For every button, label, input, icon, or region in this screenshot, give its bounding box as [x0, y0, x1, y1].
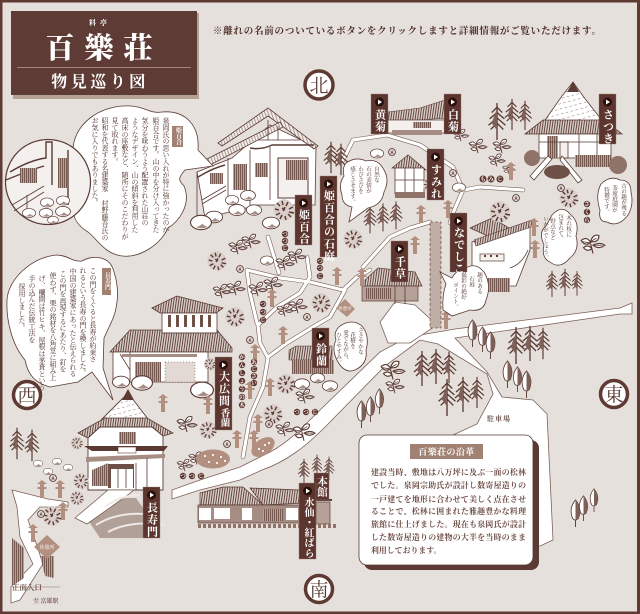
button: 白菊: 白菊 [446, 108, 459, 133]
title panel [11, 11, 199, 99]
panel: 長寿門 callout: この門を再現するにあたり、釘を [59, 270, 67, 372]
history heading [410, 444, 483, 459]
button: さつき: さつき [602, 109, 614, 145]
label: つつじ 2: じ [317, 273, 323, 280]
instruction note: ※離れの名前のついているボタンをクリックしますと詳細情報がご覧いただけます。 [213, 25, 602, 37]
history text: 利用しております。 [371, 545, 441, 555]
panel: 姫百合 callout: ようなデザイン、山の傾斜を利用した [130, 117, 139, 233]
azaleas and pines [177, 129, 605, 471]
panel: 姫百合 callout: 気分を味わうよう配置された山荘の [141, 116, 149, 226]
label: つつじ 2: つ [317, 266, 323, 272]
central garden paths [243, 135, 523, 457]
button: 本館: 本館 [316, 475, 327, 498]
label: つつじ 3: じ [260, 317, 266, 324]
label: あじさい: じ [251, 366, 257, 373]
callout: 茶室庭園 [598, 178, 632, 224]
title panel: 物見巡り図 [51, 73, 149, 91]
callout: 茶室庭園: 古の趣が残る [620, 182, 627, 216]
label: もみじ: も [480, 175, 486, 183]
panel: 姫百合 callout [73, 106, 213, 256]
button: すみれ [427, 149, 444, 200]
trees: east slope [414, 269, 583, 416]
entrance label [12, 583, 60, 592]
building: 本館 / 水仙・紅ばら [198, 487, 336, 526]
label: あじさい: さ [251, 373, 257, 380]
label: かんしょうの木: の [239, 394, 245, 401]
panel: 長寿門 callout: この門をくぐると長寿が約束さ [89, 267, 97, 363]
panel: 長寿門 callout: 採用しました。 [18, 282, 26, 331]
building: 千草 [362, 268, 422, 304]
west marker [14, 382, 40, 408]
station label: 至 富雄駅 [33, 597, 59, 605]
button: 姫百合: 姫百合 [298, 208, 310, 245]
south marker: 南 [309, 579, 329, 601]
panel: history [359, 435, 539, 570]
panel: 長寿門 callout: 中国の建築家にあったと伝えられる [68, 267, 77, 377]
panel: 長寿門 callout: 長寿門 [104, 271, 110, 291]
rest area marker: entrance [34, 535, 60, 559]
building: さつき [524, 82, 627, 183]
trees: west and south [10, 428, 334, 484]
label: かんしょうの木: う [239, 386, 245, 393]
rest area marker: upper [336, 299, 355, 317]
callout: 趣のある石庭: 趣のある [476, 271, 483, 294]
poplars [357, 320, 598, 527]
label: つつじ 3: つ [260, 310, 266, 316]
label: つつじ 4: じ [312, 409, 318, 416]
button: 水仙・紅ばら: 水仙・紅ばら [302, 496, 314, 559]
button: 本館 [314, 473, 329, 500]
callout: ひとやすみ: 愛でながら、 [342, 329, 349, 363]
button: 長寿門: 長寿門 [146, 501, 158, 538]
rest area marker: entrance: 休憩所 [39, 544, 55, 551]
history text [371, 467, 526, 555]
label: さくら: く [584, 209, 590, 216]
label: もみじ [480, 175, 504, 183]
building: 黄菊・白菊 [388, 100, 448, 135]
label: つつじ 5: つ [180, 474, 186, 480]
callout: ひとやすみ: ささやかな [357, 327, 364, 355]
button: 千草 [391, 241, 408, 282]
label: かんしょうの木: 木 [239, 401, 245, 409]
panel: 姫百合 callout: お気に入りでもありました。 [91, 117, 99, 205]
callout: 趣のある石庭: 撮影の絶好 [460, 271, 467, 301]
label: つつじ 2: つ [317, 259, 323, 265]
label: あじさい: あ [251, 359, 257, 366]
flower beds [196, 433, 278, 468]
label: かんしょうの木: か [239, 354, 245, 361]
history text: 一戸建てを地形に合わせて美しく点在させ [371, 494, 526, 504]
callout: 趣のある石庭: ポイント。 [452, 282, 459, 310]
entrance label: 正面入口 [12, 583, 42, 592]
label: もみじ: じ [497, 176, 503, 183]
history text: 旅館に仕上げました。現在も泉岡氏が設計 [371, 519, 526, 529]
north marker [305, 71, 333, 99]
callout: ひとやすみ [334, 322, 367, 371]
panel: 姫百合 callout: 姫百合です。山の中を分け入ってきた [152, 116, 160, 233]
callout: 自然な石 [340, 159, 387, 222]
building: なでしこ [470, 218, 534, 292]
history text: した数寄屋造りの建物の大半を当時のまま [371, 532, 526, 542]
callout: 木漏れ陽: 木れ枝に [565, 214, 572, 237]
building: 大広間 香蘭 [110, 296, 232, 398]
stone lanterns [28, 162, 540, 542]
callout: 自然な石: 感じさせます。 [349, 165, 356, 204]
small tree markers [38, 149, 564, 517]
button: 水仙・紅ばら [299, 483, 316, 559]
button: 鈴蘭 [312, 328, 329, 368]
label: つつじ 4 [294, 409, 318, 416]
callout: 趣のある石庭 [440, 266, 489, 316]
panel: 姫百合 callout: 高床の座敷など、随所にそのこだわりが [121, 116, 129, 240]
label: つつじ 4: つ [303, 410, 309, 416]
trees: north ridge [324, 99, 532, 233]
callout: 自然な石: わびさびを [357, 166, 364, 194]
inset: 姫百合 close-up [6, 140, 90, 224]
history text: 建設当時、敷地は八万坪に及ぶ一面の松林 [371, 467, 526, 477]
button: 鈴蘭: 鈴蘭 [314, 342, 327, 367]
label: かんしょうの木 [239, 354, 245, 409]
label: あじさい [251, 359, 257, 387]
label: つつじ 1 [282, 231, 288, 252]
callout: ひとやすみ: ひとやすみ。 [335, 332, 342, 365]
stepping stone path [430, 222, 441, 328]
parking label: 駐車場 [486, 414, 511, 423]
label: つつじ 1: じ [282, 245, 288, 252]
panel: 長寿門 callout: げ、欄間は竹ヒキ、屋根は茅葺という [38, 274, 46, 391]
callout: 木漏れ陽 [541, 209, 577, 265]
label: かんしょうの木: ょ [239, 379, 245, 385]
button: 白菊 [444, 94, 461, 134]
label: さくら: ら [584, 216, 590, 224]
button: さつき [599, 94, 616, 145]
button: 千草: 千草 [394, 255, 406, 280]
callout: 趣のある石庭: 石庭 [468, 276, 475, 288]
label: つつじ 5: じ [198, 473, 204, 480]
label: つつじ 5: つ [189, 474, 195, 480]
label: かんしょうの木: ん [239, 362, 245, 369]
button: 大広間 香蘭: 大広間 [218, 370, 230, 407]
button: 姫百合 [295, 195, 312, 245]
button: 黄菊: 黄菊 [373, 108, 386, 133]
panel: 長寿門 callout: れるという長寿の門を模しました。 [79, 267, 87, 376]
title panel: 料亭 [89, 18, 111, 27]
bottom-left buildings [12, 538, 54, 585]
title panel: 百樂荘 [45, 32, 163, 65]
north marker: 北 [309, 75, 329, 97]
building: 長寿門 [70, 389, 173, 538]
button: 姫百合の石庭: 姫百合の石庭 [322, 189, 335, 262]
button: なでしこ: なでしこ [452, 227, 465, 275]
history text: ることで、松林に囲まれた雅趣豊かな料理 [371, 506, 526, 516]
label: さくら [584, 201, 590, 224]
label: かんしょうの木: し [239, 370, 245, 377]
east marker: 東 [604, 384, 624, 406]
round shrubs [42, 188, 579, 526]
button: なでしこ [450, 213, 467, 275]
building: すみれ [392, 155, 437, 198]
button: すみれ: すみれ [430, 164, 442, 200]
label: もみじ: み [488, 176, 494, 183]
callout: 自然な石: 自然な [373, 165, 380, 183]
south marker [306, 576, 332, 602]
panel: 長寿門 callout: 手の込んだ伝統工法を [28, 274, 36, 343]
history text: でした。泉岡宗助氏が設計し数寄屋造りの [371, 480, 526, 490]
callout: 自然な石: 石の表情が [365, 166, 372, 194]
panel: 長寿門 callout [7, 255, 117, 400]
button: 姫百合の石庭 [320, 176, 337, 262]
building: 姫百合 [191, 108, 318, 230]
east marker [600, 380, 628, 408]
west marker: 西 [17, 385, 37, 407]
rest area marker: upper: 休憩所 [338, 305, 352, 312]
history heading: 百樂荘の沿革 [418, 446, 475, 457]
label: つつじ 1: つ [282, 239, 288, 245]
panel: 姫百合 callout: 姫百合 [174, 126, 182, 146]
panel: 姫百合 callout: 昭和を代表する名建築家 村野藤吾氏の [101, 116, 109, 241]
button: 大広間 香蘭: 香蘭 [218, 407, 230, 428]
callout: 木漏れ陽: 野点など [549, 217, 556, 240]
rocks [33, 149, 466, 475]
label: つつじ 3 [260, 301, 266, 324]
callout: ひとやすみ: 花樹を [349, 331, 356, 349]
pond [380, 302, 437, 343]
entrance road [11, 490, 68, 603]
button: 黄菊 [371, 94, 388, 134]
label: つつじ 2 [317, 258, 323, 280]
button: 大広間 香蘭 [215, 357, 232, 430]
label: つつじ 1: つ [282, 232, 288, 238]
callout: 茶室庭園: 特徴です。 [603, 186, 610, 214]
label: つつじ 5 [180, 473, 204, 480]
label: つつじ 3: つ [260, 302, 266, 308]
label: さくら: さ [584, 201, 590, 208]
main road network [172, 303, 632, 546]
label: あじさい: い [251, 380, 257, 387]
button: 長寿門 [143, 487, 160, 538]
panel: 姫百合 callout: 見て取れます。 [111, 116, 119, 165]
building: 鈴蘭 [276, 346, 338, 394]
callout: 木漏れ陽: 包まれて、 [557, 213, 564, 242]
callout: 茶室庭園: 茶席庭園が [611, 184, 618, 213]
callout: 木漏れ陽: いかがでしょう。 [542, 216, 549, 260]
panel: 長寿門 callout: 使わず、栗の銘材を八角堂に組み上 [49, 271, 57, 381]
panel: 姫百合 callout: 泉岡氏の思い入れが特に強かったのが [162, 116, 170, 233]
label: つつじ 4: つ [294, 410, 300, 416]
